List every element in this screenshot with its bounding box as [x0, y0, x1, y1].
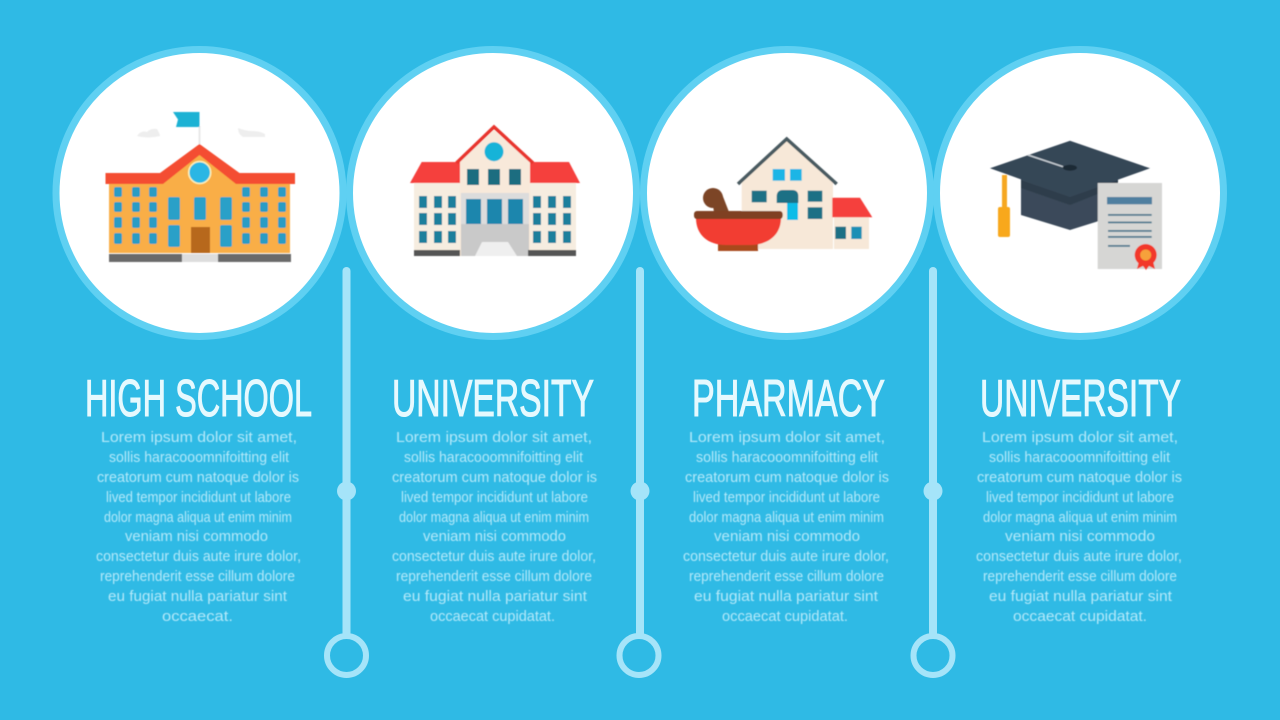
text block: pharmacy: lived tempor incididunt ut labore: [693, 489, 880, 506]
text block: high school: sollis haracooomnifoitting elit: [109, 449, 290, 466]
text block: pharmacy: sollis haracooomnifoitting elit: [696, 449, 879, 466]
text block: university: lived tempor incididunt ut labore: [401, 489, 588, 506]
heading: high school: HIGH SCHOOL: [85, 370, 312, 428]
text block: university second: [976, 429, 1182, 625]
text block: high school: creatorum cum natoque dolor is: [97, 469, 299, 486]
icon: high school building: [106, 112, 295, 262]
connector: first timeline: [327, 267, 366, 675]
text block: high school: veniam nisi commodo: [125, 528, 268, 545]
text block: university second: sollis haracooomnifoitting elit: [989, 449, 1171, 466]
text block: university: dolor magna aliqua ut enim minim: [399, 509, 589, 526]
panel: high school circle: [56, 50, 343, 336]
icon: university building: [410, 127, 580, 256]
text block: pharmacy: occaecat cupidatat.: [722, 608, 848, 625]
panel: graduation circle: [936, 50, 1224, 336]
text block: pharmacy: dolor magna aliqua ut enim minim: [689, 509, 884, 526]
text block: university second: reprehenderit esse cillum dolore: [983, 568, 1177, 585]
text block: university second: veniam nisi commodo: [1005, 528, 1155, 545]
panel: university circle: [350, 50, 636, 336]
connector: third timeline: [914, 267, 952, 675]
text block: high school: reprehenderit esse cillum dolore: [100, 568, 295, 585]
text block: university: veniam nisi commodo: [423, 528, 566, 545]
text block: university: occaecat cupidatat.: [430, 608, 555, 625]
connector: second timeline: [620, 267, 658, 675]
text block: high school: dolor magna aliqua ut enim minim: [104, 509, 292, 526]
text block: pharmacy: [683, 429, 889, 625]
text block: high school: Lorem ipsum dolor sit amet,: [101, 429, 297, 446]
text block: university: sollis haracooomnifoitting elit: [404, 449, 584, 466]
panel: pharmacy circle: [644, 50, 930, 336]
text block: university: Lorem ipsum dolor sit amet,: [396, 429, 592, 446]
text block: pharmacy: creatorum cum natoque dolor is: [685, 469, 889, 486]
icon: graduation cap and diploma: [990, 141, 1162, 270]
text block: pharmacy: eu fugiat nulla pariatur sint: [694, 588, 879, 605]
text block: pharmacy: veniam nisi commodo: [714, 528, 860, 545]
text block: university second: lived tempor incididunt ut labore: [986, 489, 1174, 506]
icon: pharmacy house and mortar: [694, 139, 872, 251]
text block: university: creatorum cum natoque dolor is: [392, 469, 597, 486]
text block: pharmacy: Lorem ipsum dolor sit amet,: [689, 429, 885, 446]
text block: university: reprehenderit esse cillum dolore: [396, 568, 592, 585]
text block: university second: consectetur duis aute irure dolor,: [976, 548, 1182, 565]
text block: pharmacy: consectetur duis aute irure dolor,: [683, 548, 889, 565]
text block: high school: [96, 429, 301, 625]
text block: high school: occaecat.: [162, 608, 233, 625]
text block: university: [392, 429, 597, 625]
text block: university second: dolor magna aliqua ut enim minim: [983, 509, 1177, 526]
text block: high school: lived tempor incididunt ut labore: [106, 489, 291, 506]
text block: high school: consectetur duis aute irure dolor,: [96, 548, 301, 565]
text block: university second: creatorum cum natoque dolor is: [977, 469, 1182, 486]
text block: high school: eu fugiat nulla pariatur sint: [108, 588, 288, 605]
text block: university second: eu fugiat nulla pariatur sint: [989, 588, 1173, 605]
text block: university: consectetur duis aute irure dolor,: [392, 548, 596, 565]
text block: university second: occaecat cupidatat.: [1013, 608, 1147, 625]
text block: university: eu fugiat nulla pariatur sint: [403, 588, 588, 605]
heading: university: UNIVERSITY: [392, 370, 594, 428]
text block: pharmacy: reprehenderit esse cillum dolore: [689, 568, 884, 585]
text block: university second: Lorem ipsum dolor sit amet,: [982, 429, 1178, 446]
heading: pharmacy: PHARMACY: [692, 370, 885, 428]
